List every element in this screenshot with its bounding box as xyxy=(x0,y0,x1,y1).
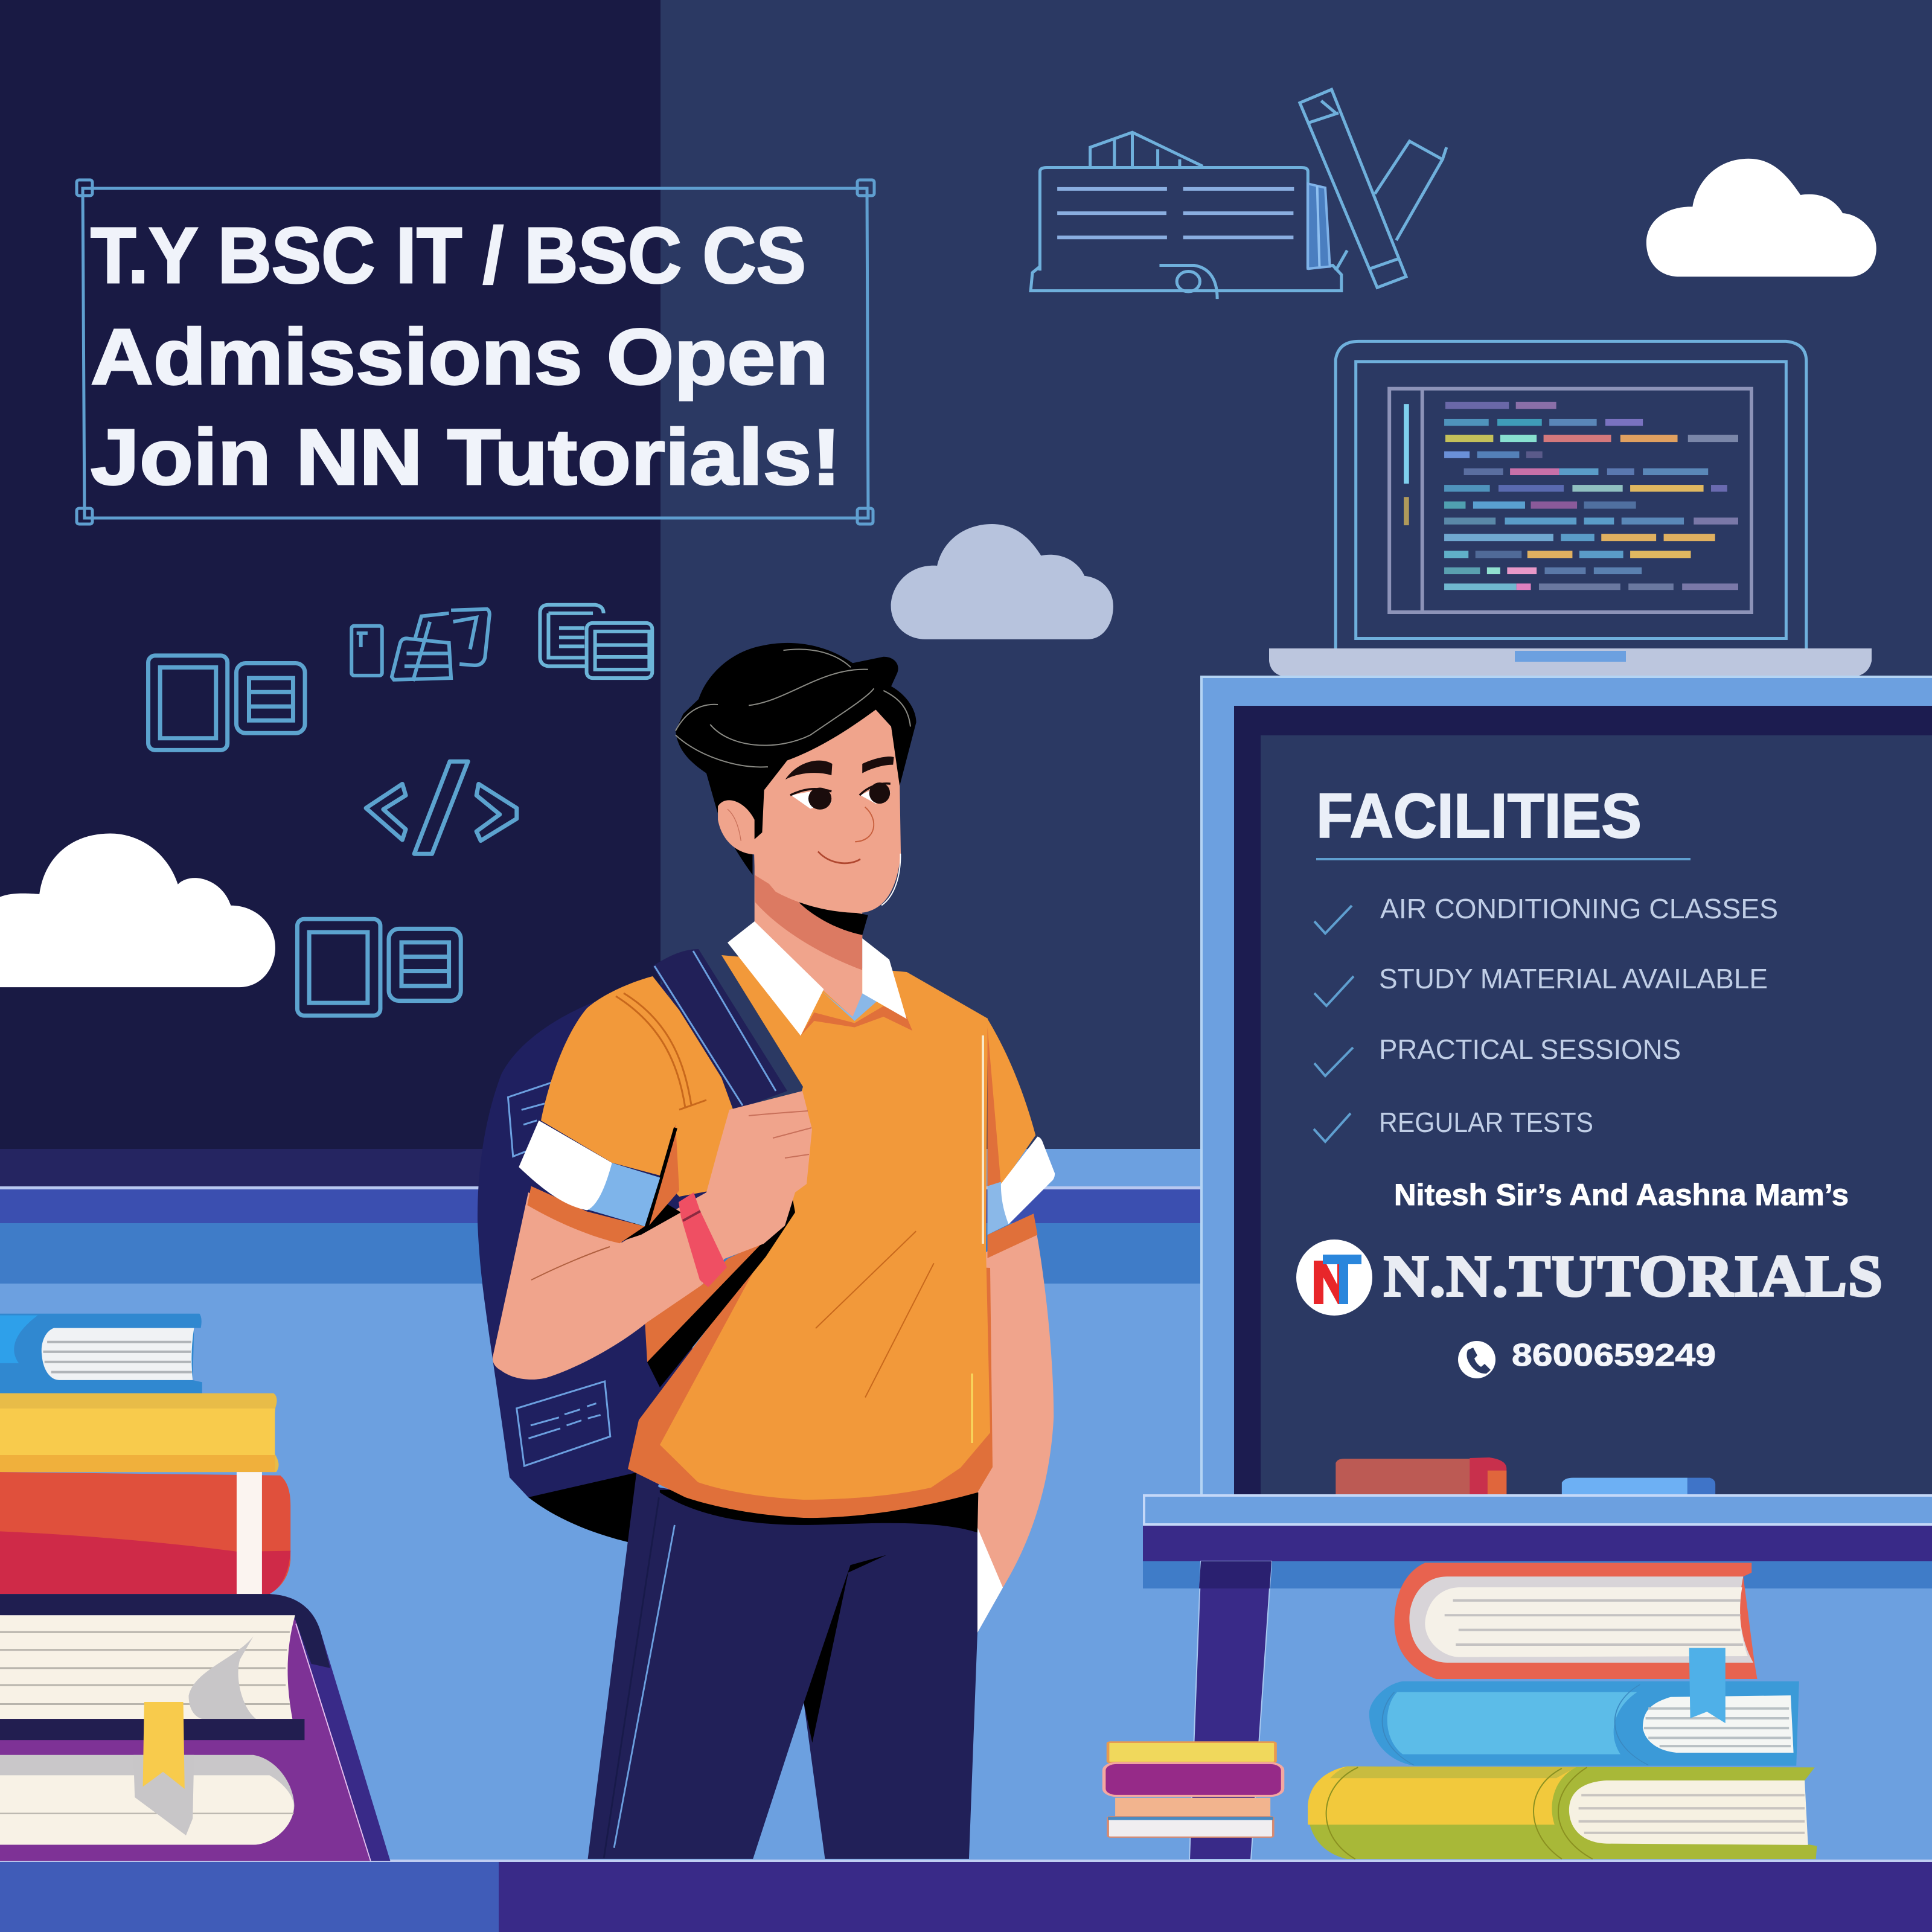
left sleeve xyxy=(519,976,734,1243)
board frame xyxy=(1201,677,1932,1498)
icon: code brackets xyxy=(366,761,517,854)
list item 3 xyxy=(1314,1034,1681,1076)
books: left stack xyxy=(0,1314,390,1861)
list item 1: AIR CONDITIONING CLASSES xyxy=(1380,893,1778,924)
eyebrows xyxy=(785,761,832,779)
list item 4: REGULAR TESTS xyxy=(1379,1107,1593,1138)
brand name: N.N.TUTORIALS xyxy=(1384,1244,1884,1309)
icon: phone xyxy=(1458,1341,1495,1378)
eyes xyxy=(791,789,831,809)
table xyxy=(1143,1495,1932,1860)
list item 1 xyxy=(1314,893,1778,933)
book: blue top xyxy=(0,1314,202,1393)
icon: windows xyxy=(540,605,652,678)
ear xyxy=(718,800,755,854)
head xyxy=(676,643,916,1036)
headline line 1: T.Y BSC IT / BSC CS xyxy=(91,211,806,299)
backpack strap xyxy=(653,949,787,1111)
book: red xyxy=(1394,1563,1757,1723)
nose xyxy=(855,807,874,842)
book: yellow and green xyxy=(1308,1767,1817,1859)
floor xyxy=(0,1860,1932,1932)
face xyxy=(752,709,901,913)
left arm hanging xyxy=(975,1222,1054,1633)
books: small stack xyxy=(1104,1742,1283,1837)
eraser red xyxy=(1335,1457,1506,1495)
mouth xyxy=(818,851,860,863)
book: yellow xyxy=(0,1393,279,1472)
eraser blue xyxy=(1562,1478,1715,1495)
right sleeve xyxy=(988,1019,1055,1258)
cloud: upper right white xyxy=(1646,159,1876,277)
torso hem xyxy=(628,1257,993,1518)
list item 3: PRACTICAL SESSIONS xyxy=(1379,1034,1681,1065)
phone number: 8600659249 xyxy=(1512,1338,1716,1373)
headline line 2: Admissions Open xyxy=(91,312,828,401)
bookmark blue xyxy=(1689,1648,1726,1723)
laptop screen outlines xyxy=(1335,341,1806,648)
icon: tablet and list group 2 xyxy=(297,919,461,1016)
heading: facilities: FACILITIES xyxy=(1316,781,1642,851)
heading underline xyxy=(1316,858,1690,860)
teachers line: Nitesh Sir’s And Aashna Mam’s xyxy=(1394,1178,1849,1212)
laptop with code xyxy=(1269,341,1872,677)
icon: outlined open book and pens xyxy=(1031,89,1447,299)
book: purple open xyxy=(0,1594,390,1861)
hand and wristband xyxy=(679,1091,812,1287)
table leg xyxy=(1189,1561,1271,1860)
cloud: left white xyxy=(0,834,275,987)
list item 2: STUDY MATERIAL AVAILABLE xyxy=(1379,963,1768,994)
frame xyxy=(77,180,874,524)
figure: student xyxy=(478,643,1055,1859)
headline line 3: Join NN Tutorials! xyxy=(91,412,841,501)
icon: NT logo xyxy=(1296,1239,1372,1316)
laptop base xyxy=(1269,648,1872,677)
torso xyxy=(660,955,990,1500)
list item 2 xyxy=(1314,963,1768,1006)
headline frame and text xyxy=(77,180,874,524)
book: blue xyxy=(1369,1681,1799,1766)
book: red xyxy=(0,1472,290,1594)
arm crease and strap gap xyxy=(531,1197,681,1280)
collar xyxy=(822,991,883,1021)
code bars xyxy=(1404,402,1738,590)
hair xyxy=(676,643,916,875)
backpack xyxy=(478,984,724,1543)
bookmark yellow xyxy=(143,1702,185,1789)
right arm xyxy=(493,1192,702,1380)
table top xyxy=(1144,1495,1932,1524)
black strap under arm xyxy=(645,1180,795,1387)
cloud: middle grey-blue xyxy=(891,524,1113,639)
books: right stack xyxy=(1308,1563,1817,1859)
icon: tablet and list group 1 xyxy=(149,656,305,750)
shirt details xyxy=(816,1035,983,1443)
icon: phone and devices xyxy=(351,609,490,681)
list item 4 xyxy=(1314,1107,1593,1142)
neck xyxy=(755,866,862,1019)
panel: facilities board xyxy=(1201,677,1932,1498)
trousers xyxy=(588,1473,978,1859)
